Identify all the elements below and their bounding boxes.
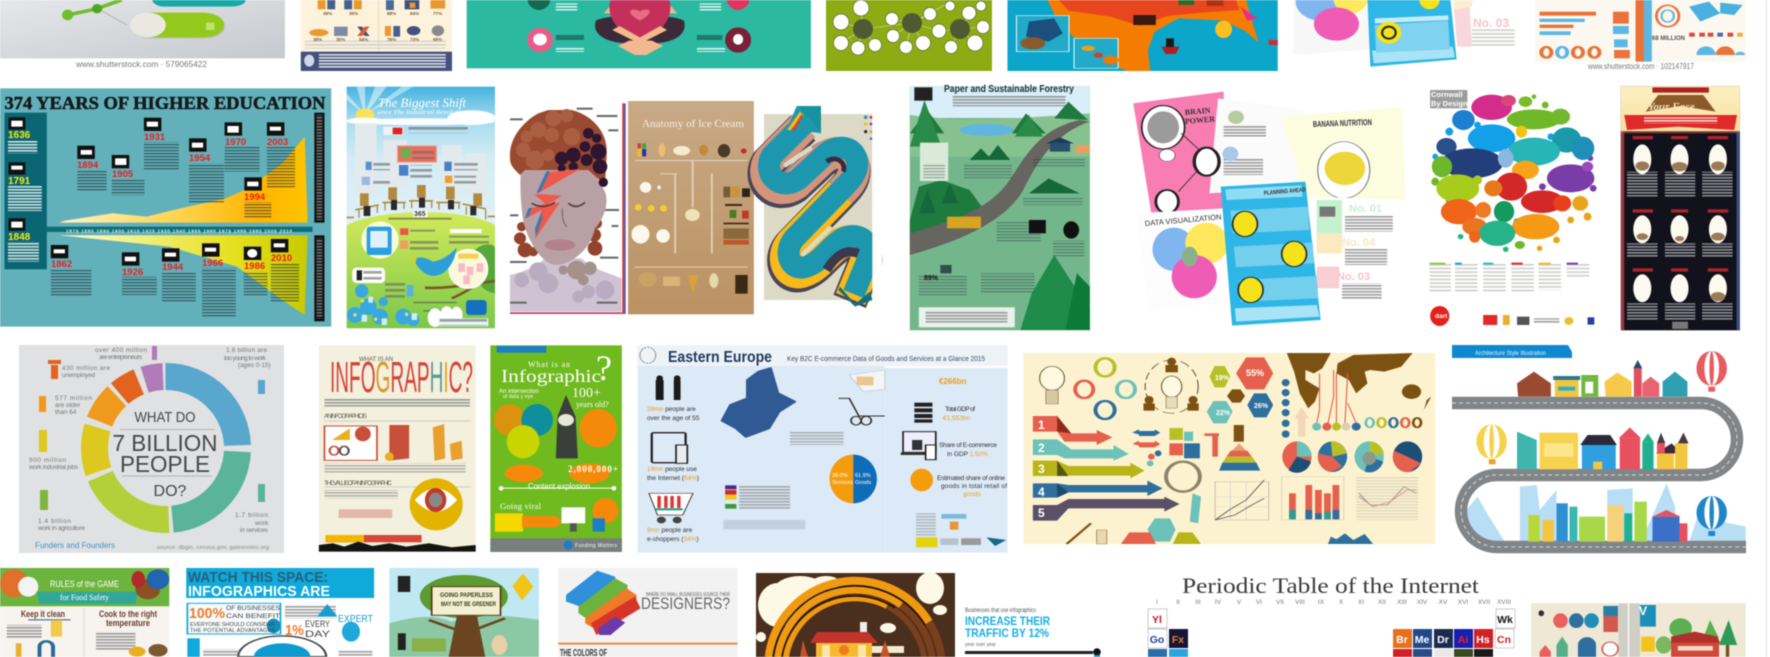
bar marker (1093, 648, 1101, 656)
yellow years (8, 130, 31, 243)
panel: rules of the game food safety: Cook to the right (99, 609, 157, 619)
pie labels: 61.9% (855, 473, 871, 479)
cornwall label: By Design (1431, 99, 1468, 108)
panel: what do 7 billion people do (19, 345, 284, 553)
panel: rules of the game food safety: Keep it clean (21, 609, 65, 619)
branch (425, 281, 495, 288)
headline: WATCH THIS SPACE: (188, 569, 328, 586)
percentage labels: 54% (359, 37, 368, 42)
hair (510, 110, 607, 185)
hexagon percentages labels: 55% (1246, 368, 1264, 378)
foliage (473, 244, 495, 293)
segment labels: 900 million (29, 457, 66, 464)
group numerals: VII (1276, 599, 1284, 606)
panel: infographic paper collage (1133, 92, 1405, 326)
stat labels: Total GDP of (945, 406, 975, 413)
titles: Going viral (500, 501, 542, 511)
group numerals: XIII (1397, 599, 1407, 606)
panel: what is an infographic (319, 345, 476, 552)
eyes (532, 202, 555, 206)
sub heading: THE VALUE OF AN INFOGRAPHIC (324, 480, 392, 487)
element symbols (1150, 614, 1513, 646)
collage paper headings: BRAIN (1184, 106, 1211, 117)
numbers on arrows: 5 (1038, 506, 1045, 520)
titles: An intersection (499, 389, 539, 395)
label ribbon: Architecture Style Illustration (1475, 350, 1546, 357)
title: Periodic Table of the Internet (1182, 573, 1479, 598)
database icon (914, 403, 932, 423)
collage paper headings: PLANNING AHEAD (1264, 187, 1307, 197)
element symbols: Yl (1152, 614, 1162, 626)
panel: flat business infographic (1535, 0, 1746, 71)
stat labels: 39mn people are (647, 406, 696, 413)
headline line two: TRAFFIC BY 12% (965, 626, 1049, 640)
red years: 1905 (112, 169, 134, 180)
numbered paper labels: No. 04 (1342, 237, 1376, 249)
buildings row 2 (1517, 427, 1689, 469)
red years: 1926 (122, 267, 143, 278)
percentage labels: 77% (433, 11, 442, 16)
stats: 100% (189, 605, 225, 622)
shutterstock caption: www.shutterstock.com · 102147917 (1587, 62, 1694, 71)
red years: 2003 (267, 137, 288, 148)
panel: green network diagram (826, 0, 992, 71)
titles: of data y eye (503, 394, 533, 400)
panel: watch this space (186, 568, 374, 657)
step arrows (1033, 416, 1180, 521)
numbers on arrows: 4 (1038, 485, 1045, 499)
label ribbon (1452, 345, 1572, 358)
group numerals: XII (1378, 599, 1386, 606)
stat labels: €266bn (939, 377, 967, 386)
red years: 1986 (244, 261, 265, 272)
percentage labels: 78% (387, 37, 396, 42)
percentage labels: 68% (433, 37, 442, 42)
clouds (756, 572, 947, 642)
statistic labels: 68 MILLION (1652, 36, 1685, 42)
house (810, 622, 878, 657)
headline: DESIGNERS? (641, 594, 730, 613)
panel: the biggest shift (346, 87, 496, 328)
headings: for Food Safety (60, 592, 110, 602)
365 number: 365 (414, 211, 426, 218)
segment labels: (ages 0-15) (238, 362, 271, 369)
titles: years old? (576, 400, 609, 409)
segment labels (28, 347, 271, 534)
red years: 2010 (271, 253, 292, 264)
percentage labels (313, 11, 442, 42)
bottom shapes (1147, 518, 1176, 542)
percentage labels: 35% (349, 11, 358, 16)
source credit: source: dbgin, census.gov, gatesnotes.org (157, 545, 269, 551)
hexagon percentages (1236, 357, 1273, 389)
numbers on arrows: 3 (1038, 462, 1045, 476)
group numerals: XV (1439, 599, 1448, 606)
group numerals: XVII (1478, 599, 1490, 606)
panel: rules of the game food safety: temperature (106, 618, 150, 628)
collage paper headings: DATA VISUALIZATION (1144, 212, 1222, 228)
rainbow arcs brown (769, 581, 941, 657)
timeline axis years: 1870 1880 1890 1900 1910 1920 1930 1940 1950 1960 1970 1980 1990 2000 2010 (66, 228, 292, 234)
segment labels: work in agriculture (37, 525, 85, 532)
sign text: GOING PAPERLESS (440, 592, 494, 599)
group numerals: XVIII (1497, 599, 1511, 606)
tablet (361, 221, 399, 259)
yellow years: 1791 (8, 176, 31, 187)
kicker: Businesses that use infographics (965, 608, 1036, 614)
map pins (1366, 418, 1421, 427)
panel: paper and sustainable forestry (910, 84, 1090, 330)
side curls (514, 218, 602, 257)
numbered paper labels: No. 01 (1349, 203, 1382, 215)
milestone icons (8, 117, 288, 266)
group numerals: III (1195, 599, 1201, 606)
stat labels: Share of E-commerce (939, 442, 997, 449)
cream circle (449, 250, 488, 288)
stat labels: 19mn people use (647, 466, 697, 473)
stat labels: in GDP 1.50% (947, 451, 988, 458)
stat labels: Estimated share of online (937, 475, 1005, 482)
pie labels: 38.0% (832, 473, 848, 479)
titles: 2,000,000+ (568, 464, 618, 474)
stat labels: €1,553bn (943, 415, 970, 422)
group numerals: XIV (1417, 599, 1428, 606)
segment labels: 577 million (55, 395, 92, 402)
kicker: WHERE DO SMALL BUSINESSES SOURCE THEIR (646, 592, 730, 598)
group numerals: VI (1256, 599, 1262, 606)
panel: David Bowie portrait (510, 103, 626, 314)
red years: 1966 (202, 258, 223, 269)
group numerals: V (1237, 599, 1242, 606)
panel: eco town infographic (1531, 603, 1746, 657)
hexagon percentages labels: 26% (1254, 403, 1269, 410)
panel: watch this space: EVERY (305, 619, 330, 629)
segment labels: over 400 million (95, 347, 147, 354)
red years: 1862 (51, 259, 72, 270)
rainbow dark divider lines (773, 586, 925, 657)
sign text (440, 592, 496, 608)
title: Eastern Europe (668, 349, 772, 366)
titles: Funding Matters (575, 543, 618, 549)
element symbols: Hs (1476, 634, 1490, 646)
group numerals: XVI (1458, 599, 1468, 606)
pie labels: Services (832, 480, 853, 486)
lightbulb ideas (1040, 366, 1064, 390)
hill (347, 212, 495, 328)
road (1452, 403, 1746, 547)
segment labels: unemployed (62, 372, 95, 379)
panel: anatomy of ice cream (628, 101, 754, 314)
stat labels: over the age of 55 (647, 415, 700, 422)
panel: watch this space: OF BUSINESSES (226, 606, 280, 612)
stat labels: goods in total retail of (941, 483, 1007, 490)
cornwall label: Cornwall (1431, 90, 1463, 99)
titles: ? (596, 348, 612, 388)
people (1143, 358, 1199, 411)
red and blue edge lines (622, 103, 624, 314)
red years: 1970 (225, 137, 246, 148)
element symbols: Cn (1497, 634, 1511, 646)
kicker: WHAT IS AN (359, 357, 393, 363)
progress bar (965, 651, 1093, 654)
panel: shutterstock timeline graphic (0, 0, 285, 69)
orange percent badge (910, 469, 933, 491)
percentage labels: 38% (323, 11, 332, 16)
panel: architecture style illustration (1452, 345, 1746, 547)
yellow years: 1636 (8, 130, 31, 141)
pie labels (832, 473, 871, 486)
stat labels: the Internet (64%) (647, 475, 699, 482)
segment labels: too young to work (224, 355, 267, 362)
segment labels: 430 million are (62, 365, 110, 372)
subtitle: Key B2C E-commerce Data of Goods and Services at a Glance 2015 (787, 354, 985, 363)
stat labels: e-shoppers (34%) (647, 536, 699, 543)
group numerals (1156, 599, 1511, 606)
balloon yellow (1476, 424, 1507, 464)
cornwall label (1431, 90, 1468, 108)
panel: illustrated USA map (1007, 0, 1278, 71)
legend dots (864, 116, 867, 119)
titles: What is an (528, 360, 570, 369)
donut chart (94, 376, 238, 520)
panel: going paperless tree (389, 568, 539, 657)
panel: what is an infographic green (490, 345, 622, 552)
titles: 100+ (572, 386, 601, 401)
laptop icon (903, 432, 936, 452)
center headline: WHAT DO (134, 410, 196, 426)
segment labels: than 64 (55, 409, 77, 416)
red years: 1954 (189, 153, 211, 164)
group numerals: XI (1358, 599, 1364, 606)
hexagon percentages labels: 22% (1216, 410, 1231, 417)
hexagon percentages labels: 19% (1215, 375, 1230, 382)
lightning bolt (525, 169, 580, 239)
shopping cart red people (649, 493, 693, 515)
group numerals: IV (1215, 599, 1222, 606)
badge and eggs (466, 300, 487, 315)
buildings row 3 (1528, 502, 1687, 542)
services and goods pie (830, 455, 853, 503)
red years: 1944 (162, 262, 184, 273)
logos (941, 514, 966, 519)
stat: 89% (924, 275, 939, 282)
balloon blue (1696, 496, 1727, 536)
percentage labels: 84% (410, 11, 419, 16)
element symbols: Br (1396, 634, 1408, 646)
numbers on arrows: 1 (1038, 418, 1045, 432)
numbered paper labels (1337, 203, 1382, 283)
panel: rules of the game food safety (0, 568, 169, 657)
heading: Paper and Sustainable Forestry (944, 84, 1074, 95)
segment labels: work industrial jobs (28, 464, 78, 471)
numbers on arrows (1038, 418, 1045, 520)
red years (51, 132, 292, 278)
title: Your Face (1648, 101, 1695, 113)
red years: 1994 (244, 192, 266, 203)
flag rows (725, 485, 736, 489)
arrow head (797, 106, 821, 133)
element symbols: Me (1415, 634, 1429, 646)
segment labels: in services (240, 527, 268, 534)
question title: INFOGRAPHIC? (330, 353, 473, 402)
title: The Biggest Shift (378, 95, 466, 110)
percentage labels: 35% (336, 37, 345, 42)
titles: Content explosion (528, 482, 590, 491)
panel: Eastern Europe e-commerce (638, 345, 1007, 553)
headline line one: INCREASE THEIR (965, 614, 1050, 628)
subtitle: since The Industrial Revolution (377, 109, 467, 116)
balloon red (1696, 351, 1727, 392)
leaf nodes (833, 0, 990, 55)
pyramid with person (1234, 425, 1244, 442)
scrollbar edge line (1766, 0, 1767, 657)
red years: 1894 (77, 160, 99, 171)
hexagon percentages labels (1215, 368, 1269, 417)
panel: pregnancy infographic (467, 0, 811, 68)
face (520, 168, 607, 265)
center headline: 7 BILLION (112, 430, 218, 456)
bird (413, 248, 457, 276)
icons (39, 346, 265, 510)
panel: watch this space: THE POTENTIAL ADVANTAGES (190, 628, 275, 634)
device icon (652, 433, 686, 463)
segment labels: 1.8 billion are (226, 347, 267, 354)
collage paper headings (1144, 106, 1372, 228)
panel: 374 years of higher education (0, 88, 331, 327)
s road layers (765, 121, 869, 301)
note: year over year (965, 642, 996, 648)
segment labels: 1.4 billion (38, 518, 71, 525)
element symbols: Go (1150, 634, 1164, 646)
map of eastern europe (722, 368, 795, 437)
headings (50, 579, 119, 602)
panel: rainbow house (756, 572, 955, 657)
panel: cream icon statistics (301, 0, 452, 71)
panel: all the beards your face (1621, 86, 1740, 330)
line and bar charts (1215, 477, 1418, 520)
panel: vintage infographic elements (1023, 353, 1435, 544)
shoulders (510, 258, 622, 312)
panel: watch this space: INFOGRAPHICS ARE (188, 583, 330, 600)
element tiles (1148, 609, 1515, 657)
center headline: DO? (154, 483, 187, 500)
cart icon (839, 398, 885, 416)
group numerals: I (1156, 599, 1158, 606)
percentage labels: 38% (313, 37, 322, 42)
numbered hex steps (1075, 358, 1135, 419)
center headline (112, 410, 218, 500)
chart title: 374 YEARS OF HIGHER EDUCATION (4, 93, 326, 113)
segment labels: are older (55, 402, 81, 409)
headings: RULES of the GAME (50, 579, 119, 589)
numbered paper labels: No. 03 (1337, 271, 1370, 283)
panel: watch this space: EVERYONE SHOULD CONSIDER (190, 622, 275, 628)
segment labels: are entrepreneurs (99, 354, 142, 361)
no. 03 label: No. 03 (1473, 16, 1509, 30)
mini arrows and blocks (1132, 429, 1160, 436)
panel: watch this space: DAY (305, 629, 330, 639)
shutterstock caption: www.shutterstock.com · 579065422 (75, 59, 207, 69)
world map (1287, 353, 1331, 408)
buildings row 1 (1517, 360, 1687, 397)
pale skyline (1466, 483, 1746, 543)
title: Anatomy of Ice Cream (642, 118, 744, 130)
pie labels: Goods (855, 480, 871, 486)
center headline: PEOPLE (120, 451, 210, 477)
element symbols: Wk (1497, 614, 1513, 626)
blue birds (347, 284, 419, 326)
collage paper headings: BANANA NUTRITION (1313, 117, 1372, 129)
panel: watch this space: 1% (285, 622, 304, 639)
numbers on arrows: 2 (1038, 441, 1045, 455)
hub nodes (853, 13, 970, 39)
column of dots (1282, 379, 1290, 438)
panel: watch this space: EXPERT (338, 614, 373, 625)
group numerals: X (1339, 599, 1344, 606)
percentage labels: 88% (387, 11, 396, 16)
group numerals: VIII (1295, 599, 1305, 606)
road slots (786, 148, 830, 254)
titles: Infographic (501, 366, 601, 386)
people icons (656, 375, 681, 400)
inner dark lane (827, 159, 844, 172)
percentage labels: 73% (410, 37, 419, 42)
rainbow arcs orange (769, 581, 929, 657)
group numerals: IX (1318, 599, 1325, 606)
stat labels (647, 377, 1007, 543)
panel: watch this space: CAN BENEFIT (226, 614, 280, 620)
element symbols: Fx (1172, 634, 1184, 646)
sub heading: AN INFOGRAPHIC IS (324, 413, 368, 420)
radial pie charts (1282, 441, 1422, 473)
chairs and fence (347, 185, 495, 219)
red years: 1931 (144, 132, 166, 143)
panel: periodic table of the internet (1148, 573, 1515, 657)
element symbols: Ai (1458, 634, 1468, 646)
speech bubble (352, 268, 385, 283)
letter badge: V (1639, 604, 1647, 618)
dart logo: dart (1435, 313, 1448, 320)
segment labels: work (254, 520, 269, 527)
panel: designers stairs (558, 568, 738, 657)
collage paper headings: POWER (1184, 114, 1216, 126)
element symbols: Dr (1437, 634, 1449, 646)
segment labels: 1.7 billion (235, 512, 268, 519)
stat labels: 9mn people are (647, 527, 693, 534)
group numerals: II (1176, 599, 1180, 606)
panel: venn and planning collage top (1294, 0, 1518, 67)
brand credit: Funders and Founders (35, 540, 115, 550)
panel: S shaped road infographic (764, 106, 882, 307)
yellow years: 1848 (8, 232, 31, 243)
milestone copy (8, 140, 37, 153)
panel: increase their traffic (965, 608, 1101, 657)
panel: Cornwall by design bubble chart (1430, 90, 1597, 326)
pose figure (595, 0, 685, 55)
titles (499, 348, 618, 549)
stat labels: goods (963, 491, 981, 498)
small scattered dots (1431, 94, 1597, 252)
sign text: MAY NOT BE GREENER (441, 601, 496, 608)
